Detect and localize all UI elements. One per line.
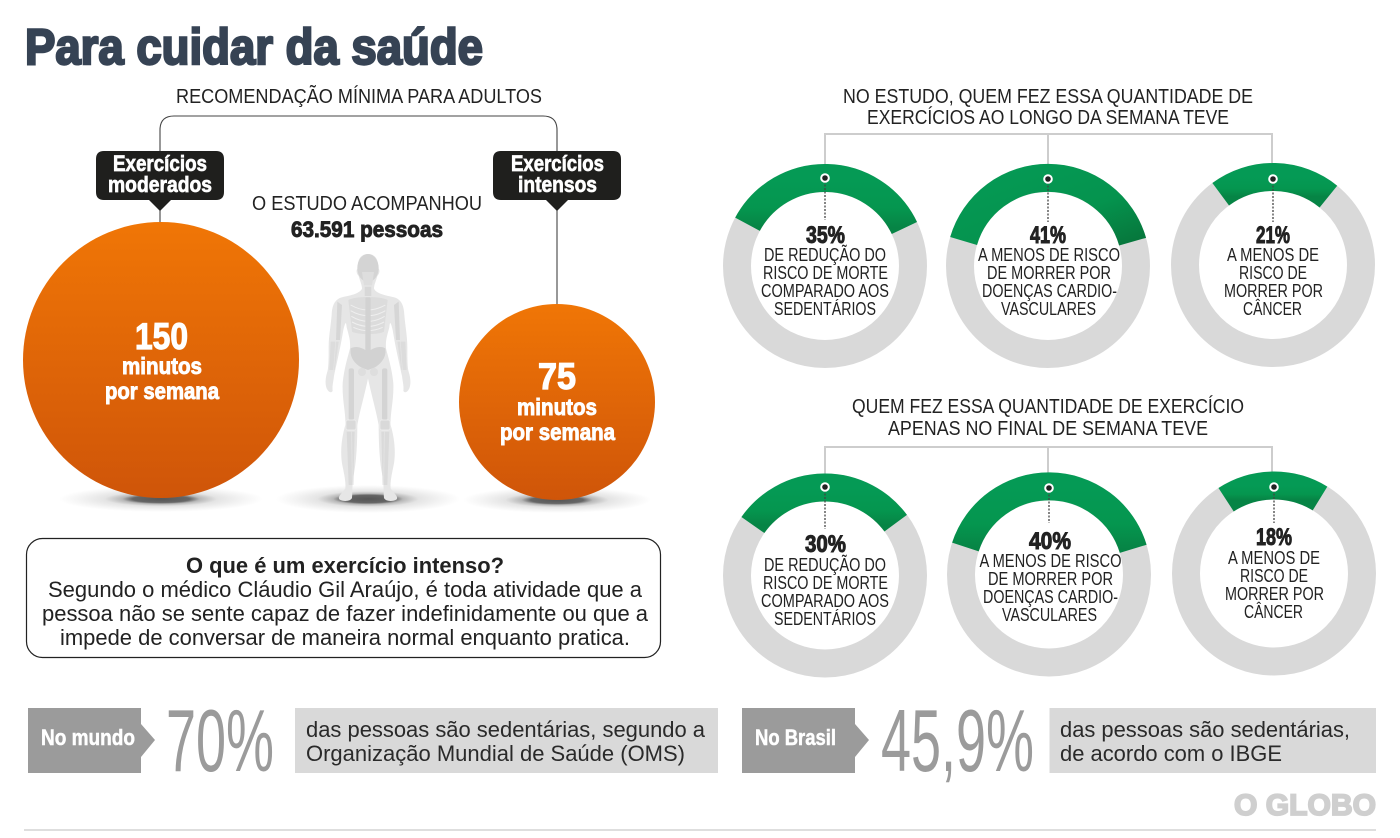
heading: weekly exercise: NO ESTUDO, QUEM FEZ ESSA QUANTIDADE DE xyxy=(843,86,1253,108)
donut: 30%: COMPARADO AOS xyxy=(761,591,889,611)
callout: what is intense exercise: impede de conversar de maneira normal enquanto pratica. xyxy=(60,625,630,650)
shadow: large circle xyxy=(59,486,263,512)
donut: 18%: RISCO DE xyxy=(1240,566,1308,586)
circle: moderate 150 minutes: 150 xyxy=(135,316,188,357)
connector: lower row xyxy=(825,447,1272,478)
donut: 35%: COMPARADO AOS xyxy=(761,281,889,301)
tag: moderate exercise: Exercícios xyxy=(113,151,207,176)
stat: world 70%: das pessoas são sedentárias, segundo a xyxy=(306,717,705,742)
stat: Brazil 45,9%: de acordo com o IBGE xyxy=(1060,741,1282,766)
donut: 18%: A MENOS DE xyxy=(1228,548,1320,568)
heading: weekly exercise: EXERCÍCIOS AO LONGO DA SEMANA TEVE xyxy=(867,106,1229,129)
stat: world 70%: Organização Mundial de Saúde (OMS) xyxy=(306,741,685,766)
stat: Brazil 45,9%: No Brasil xyxy=(755,725,836,750)
stat: world 70% xyxy=(28,691,718,790)
donut: 30% xyxy=(737,483,913,664)
heading: weekend exercise: APENAS NO FINAL DE SEMANA TEVE xyxy=(888,418,1208,440)
study note: 63.591 pessoas xyxy=(291,217,443,242)
callout: what is intense exercise: O que é um exercício intenso? xyxy=(186,553,504,578)
donut: 40% xyxy=(961,484,1137,662)
circle: moderate 150 minutes xyxy=(23,222,299,498)
donut: 40%: DE MORRER POR xyxy=(988,569,1113,589)
shadow: figure xyxy=(276,485,460,513)
tag: intense exercise: intensos xyxy=(518,172,597,197)
donut: 41%: A MENOS DE RISCO xyxy=(978,245,1120,265)
tag: moderate exercise xyxy=(96,151,224,211)
stat: world 70%: 70% xyxy=(166,691,274,790)
circle: intense 75 minutes: 75 xyxy=(538,356,576,397)
donut: 18%: CÂNCER xyxy=(1244,602,1303,622)
donut: 30%: DE REDUÇÃO DO xyxy=(764,554,886,575)
study note: O ESTUDO ACOMPANHOU xyxy=(252,193,482,215)
shadow: small circle xyxy=(463,487,651,513)
donut: 18%: MORRER POR xyxy=(1225,584,1324,604)
donut: 41% xyxy=(960,175,1136,354)
tag: intense exercise xyxy=(493,151,621,211)
connector bracket xyxy=(160,116,557,304)
circle: intense 75 minutes: minutos xyxy=(517,394,597,420)
circle: moderate 150 minutes: por semana xyxy=(105,378,219,404)
connector: upper row xyxy=(825,134,1272,165)
donut: 41%: VASCULARES xyxy=(1001,299,1096,319)
stat: Brazil 45,9% xyxy=(742,691,1376,790)
donut: 21%: MORRER POR xyxy=(1224,281,1323,301)
tag: moderate exercise: moderados xyxy=(108,172,212,197)
callout: what is intense exercise: pessoa não se sente capaz de fazer indefinidamente ou que a xyxy=(42,601,649,626)
donut: 18%: 18% xyxy=(1256,524,1292,551)
donut: 35%: SEDENTÁRIOS xyxy=(774,299,876,319)
logo: O Globo: O GLOBO xyxy=(1234,789,1376,822)
donut: 41%: 41% xyxy=(1030,222,1066,249)
donut: 35% xyxy=(737,174,913,354)
circle: intense 75 minutes: por semana xyxy=(500,419,615,445)
donut: 40%: A MENOS DE RISCO xyxy=(980,551,1122,571)
heading: weekly exercise xyxy=(843,86,1253,129)
circle: intense 75 minutes xyxy=(459,304,655,500)
donut: 30%: 30% xyxy=(805,531,846,558)
donut: 30%: RISCO DE MORTE xyxy=(763,573,888,593)
donut: 21%: RISCO DE xyxy=(1239,263,1307,283)
donut: 21%: CÂNCER xyxy=(1243,299,1302,319)
heading: weekend exercise xyxy=(852,395,1244,440)
heading: weekend exercise: QUEM FEZ ESSA QUANTIDADE DE EXERCÍCIO xyxy=(852,395,1244,418)
donut: 21%: A MENOS DE xyxy=(1227,245,1319,265)
donut: 30%: SEDENTÁRIOS xyxy=(774,609,876,629)
donut: 41%: DOENÇAS CARDIO- xyxy=(982,281,1117,301)
tag: intense exercise: Exercícios xyxy=(511,151,604,176)
donut: 40%: DOENÇAS CARDIO- xyxy=(983,587,1118,607)
stat: Brazil 45,9%: das pessoas são sedentárias, xyxy=(1060,717,1350,742)
stat: Brazil 45,9%: 45,9% xyxy=(881,691,1034,790)
heading: minimum recommendation: RECOMENDAÇÃO MÍNIMA PARA ADULTOS xyxy=(176,84,542,108)
callout: what is intense exercise: Segundo o médico Cláudio Gil Araújo, é toda atividade que a xyxy=(48,577,643,602)
stat: world 70%: No mundo xyxy=(41,725,135,750)
donut: 35%: DE REDUÇÃO DO xyxy=(764,244,886,265)
donut: 40%: 40% xyxy=(1029,528,1071,555)
title: Para cuidar da saúde xyxy=(25,19,483,75)
donut: 21%: 21% xyxy=(1256,222,1290,249)
donut: 41%: DE MORRER POR xyxy=(987,263,1111,283)
donut: 35%: 35% xyxy=(806,222,845,249)
icon: human body with skeleton xyxy=(326,254,410,501)
donut: 35%: RISCO DE MORTE xyxy=(763,263,888,283)
donut: 40%: VASCULARES xyxy=(1002,605,1097,625)
callout: what is intense exercise xyxy=(26,538,660,658)
donut: 18% xyxy=(1186,483,1362,662)
circle: moderate 150 minutes: minutos xyxy=(122,353,202,379)
donut: 21% xyxy=(1185,175,1361,353)
study note xyxy=(252,193,482,242)
